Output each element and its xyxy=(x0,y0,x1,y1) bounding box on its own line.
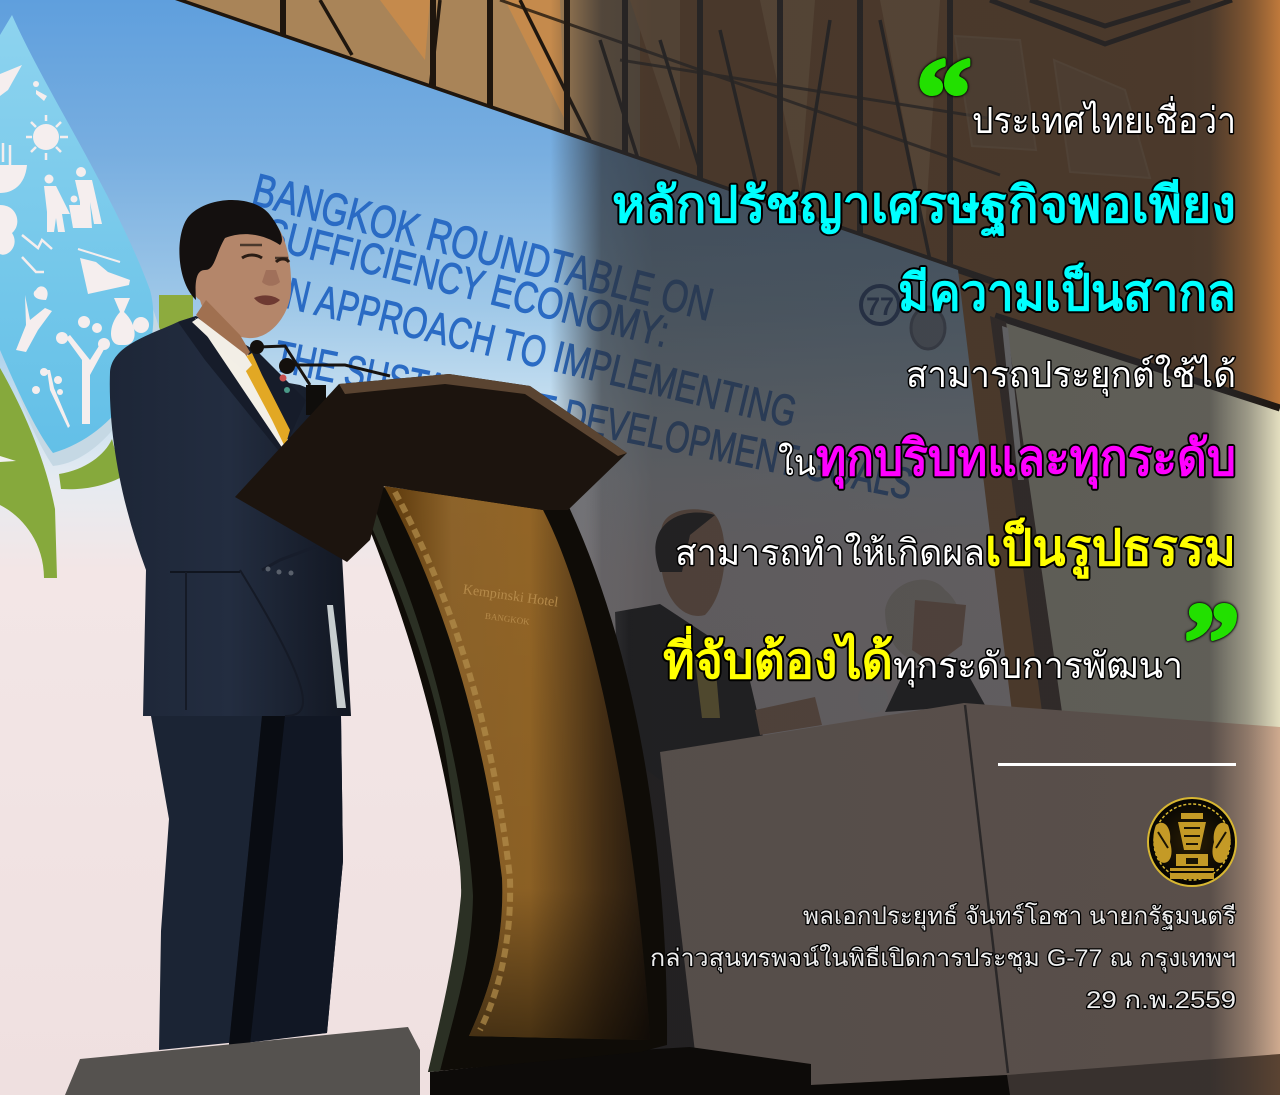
seated delegates xyxy=(615,509,985,780)
stage front xyxy=(430,1047,811,1095)
line 6: เป็นรูปธรรม xyxy=(985,517,1236,579)
quote text xyxy=(612,36,1240,705)
jacket tassel xyxy=(327,605,346,708)
line 4: สามารถประยุกต์ใช้ได้ xyxy=(906,354,1236,397)
G-77 logo: 77 xyxy=(866,293,894,321)
line 6 xyxy=(675,517,1236,579)
line 5: ใน xyxy=(778,442,816,483)
podium stand xyxy=(351,484,667,1072)
drop pictograms xyxy=(0,65,149,428)
eyes and mouth xyxy=(240,245,288,258)
line 6: สามารถทำให้เกิดผล xyxy=(675,532,985,573)
jacket xyxy=(110,316,351,716)
banner heading: AN APPROACH TO IMPLEMENTING xyxy=(260,264,801,437)
drop xyxy=(0,15,153,453)
date: 29 ก.พ.2559 xyxy=(1086,987,1236,1014)
podium xyxy=(235,374,667,1072)
neck and face xyxy=(189,211,291,338)
banner heading: BANGKOK ROUNDTABLE ON xyxy=(248,163,719,331)
government seal xyxy=(1148,798,1236,886)
green leaves xyxy=(0,368,57,578)
G-77 logo xyxy=(861,286,899,324)
stage floor xyxy=(690,1047,1280,1095)
line 2: หลักปรัชญาเศรษฐกิจพอเพียง xyxy=(612,177,1236,237)
opening quote mark: “ xyxy=(916,36,972,160)
banner seal xyxy=(911,307,945,349)
occasion: กล่าวสุนทรพจน์ในพิธีเปิดการประชุม G-77 ณ กรุงเทพฯ xyxy=(650,944,1236,973)
closing quote mark: ” xyxy=(1184,581,1240,705)
line 3: มีความเป็นสากล xyxy=(898,262,1236,321)
banner heading xyxy=(248,163,945,509)
podium inscription: BANGKOK xyxy=(484,611,531,627)
water drop logo xyxy=(0,15,193,578)
line 7: ที่จับต้องได้ xyxy=(663,626,893,689)
projection screen xyxy=(990,316,1280,735)
pin xyxy=(280,374,286,382)
overlay edge behind podium xyxy=(555,440,630,740)
banner heading: SUFFICIENCY ECONOMY: xyxy=(260,209,674,357)
ceiling panels xyxy=(175,0,640,160)
podium inscription: Kempinski Hotel xyxy=(462,582,559,611)
line 5: ทุกบริบทและทุกระดับ xyxy=(816,430,1236,489)
divider xyxy=(998,763,1236,766)
speaker: man in suit xyxy=(110,200,351,1050)
hair xyxy=(179,200,282,300)
dark backdrop behind table xyxy=(615,745,700,1095)
attribution xyxy=(650,902,1236,1014)
lectern top xyxy=(235,374,627,562)
microphones xyxy=(250,340,390,415)
line 1: ประเทศไทยเชื่อว่า xyxy=(972,96,1236,141)
tie xyxy=(240,353,290,447)
banner heading: THE SUSTAINABLE DEVELOPMENT GOALS xyxy=(270,332,917,509)
line 7: ทุกระดับการพัฒนา xyxy=(893,645,1183,688)
ceiling truss xyxy=(175,0,1232,284)
speakers on wall xyxy=(955,36,1150,178)
stage monitor xyxy=(65,1027,420,1095)
draped table xyxy=(660,703,1280,1095)
trousers xyxy=(151,716,343,1050)
podium inscription xyxy=(459,582,559,630)
drop shadow ring xyxy=(0,300,160,466)
speaker name: พลเอกประยุทธ์ จันทร์โอชา นายกรัฐมนตรี xyxy=(803,902,1236,931)
line 7 xyxy=(663,626,1183,689)
